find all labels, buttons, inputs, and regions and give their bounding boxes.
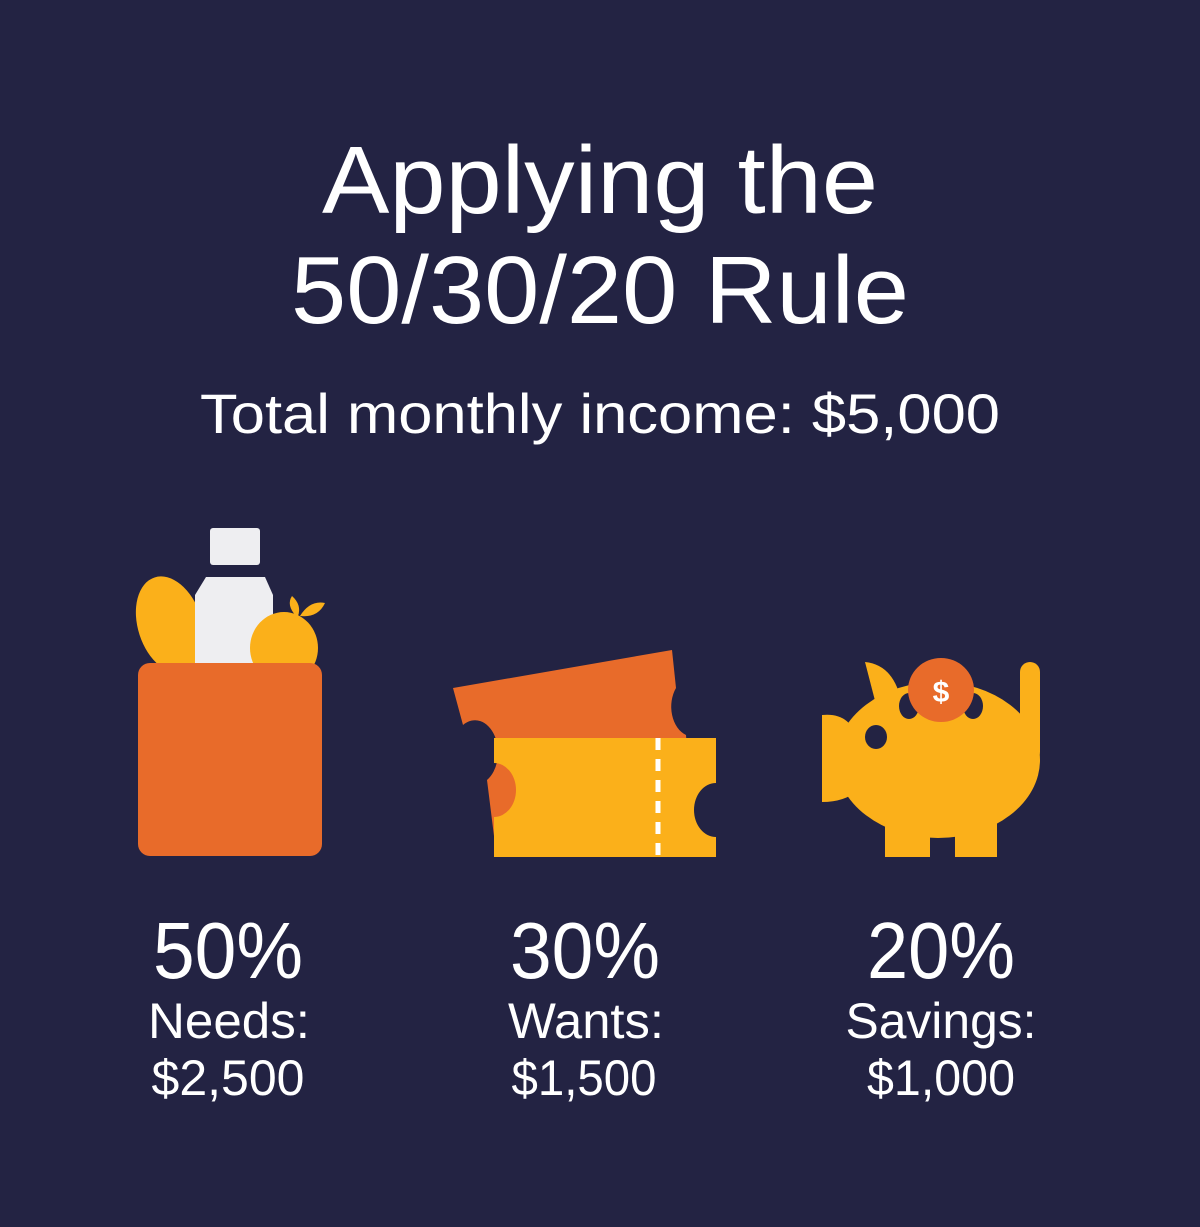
stat: savings bbox=[846, 906, 1036, 1106]
subtitle: Total monthly income: $5,000 bbox=[200, 382, 1000, 445]
stat: needs: Needs: bbox=[148, 993, 310, 1049]
icon: grocery bag bbox=[124, 528, 325, 856]
icon: piggy bank: $ bbox=[933, 676, 950, 709]
stat: savings: Savings: bbox=[846, 993, 1036, 1049]
stat: wants: Wants: bbox=[508, 993, 664, 1049]
stat: needs: 50% bbox=[153, 906, 303, 995]
icon: tickets bbox=[453, 650, 716, 857]
stat: needs bbox=[148, 906, 310, 1106]
stat: wants bbox=[508, 906, 664, 1106]
icon: piggy bank bbox=[822, 658, 1040, 857]
stat: wants: 30% bbox=[510, 906, 660, 995]
stat: savings: 20% bbox=[867, 906, 1015, 995]
title: 50/30/20 Rule bbox=[291, 237, 909, 344]
stat: needs: $2,500 bbox=[152, 1050, 304, 1106]
stat: savings: $1,000 bbox=[867, 1050, 1015, 1106]
stat: wants: $1,500 bbox=[512, 1050, 656, 1106]
title: Applying the bbox=[322, 127, 878, 234]
title bbox=[291, 127, 909, 344]
